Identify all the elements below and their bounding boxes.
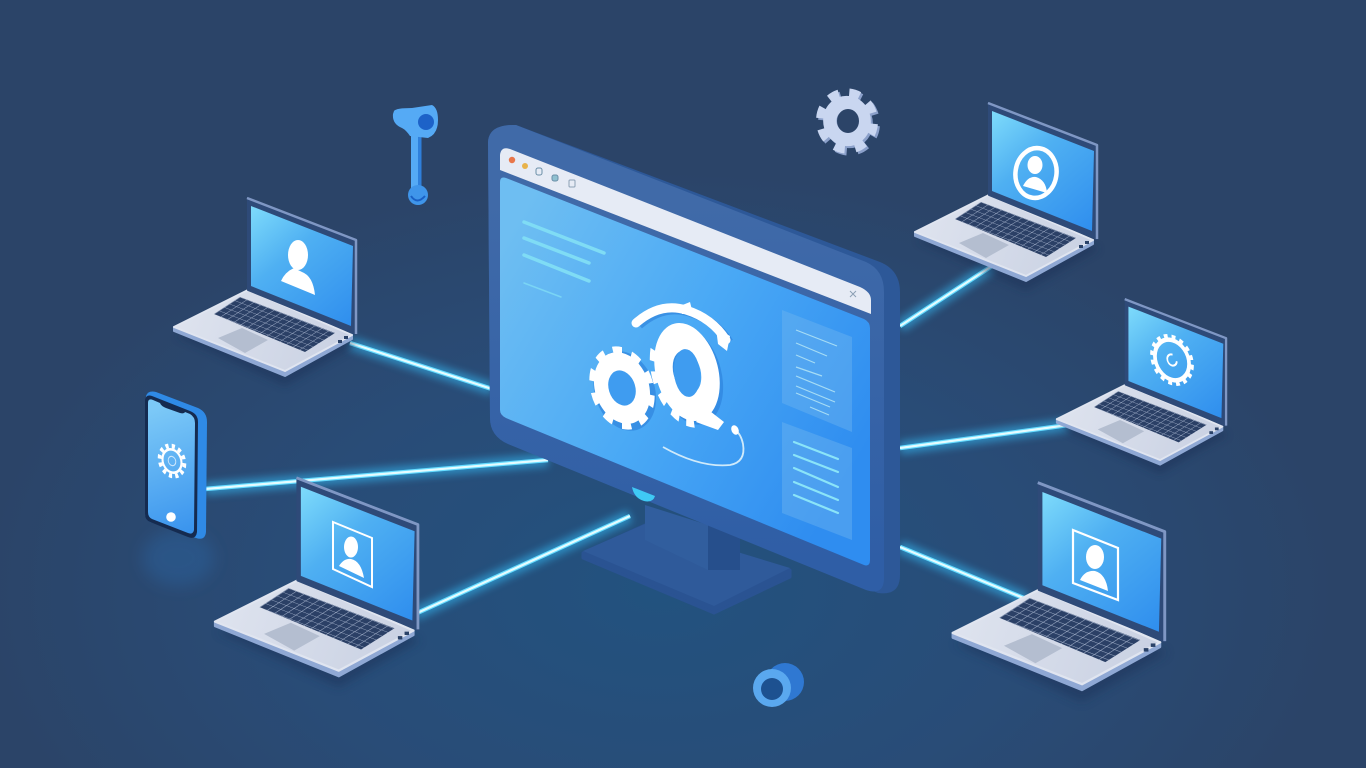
laptop: upper right — [915, 103, 1099, 291]
icon: ring — [753, 663, 804, 707]
icon: user in frame — [1073, 530, 1118, 600]
small gear icon on screen — [593, 346, 651, 430]
monitor body — [488, 125, 900, 593]
laptop: lower left — [215, 478, 420, 687]
icon: gear with spiral — [1152, 332, 1192, 388]
central monitor — [488, 125, 900, 593]
upper right panel — [782, 310, 852, 432]
icon: user in circle — [1012, 145, 1060, 201]
browser header — [500, 148, 871, 314]
connection line: upper-left laptop to monitor — [350, 343, 492, 389]
icon: user in frame — [333, 522, 372, 587]
laptop: lower right — [953, 483, 1167, 702]
large gear icon on screen — [636, 302, 730, 430]
icon: phone gear — [160, 443, 184, 479]
connection line: upper-right laptop to monitor — [900, 266, 992, 326]
connection line: lower-right laptop to monitor — [900, 547, 1026, 599]
connection line: middle-right laptop to monitor — [900, 425, 1068, 448]
cable curve with plug — [663, 424, 743, 465]
icon: wrench — [393, 105, 438, 205]
laptop: upper left — [174, 198, 358, 386]
connection line: phone to monitor — [205, 460, 548, 489]
phone — [142, 392, 214, 586]
icon: user — [281, 240, 315, 295]
lower right panel — [782, 422, 852, 540]
connection line: lower-left laptop to monitor — [415, 516, 630, 614]
LED indicator — [632, 487, 655, 501]
laptop: middle right — [1057, 299, 1228, 474]
monitor screen — [500, 178, 870, 565]
sidebar text lines — [524, 222, 604, 297]
icon: floating gear — [818, 90, 878, 154]
phone home button — [166, 512, 176, 522]
monitor stand — [583, 505, 790, 613]
window controls — [509, 157, 856, 297]
monitor front bezel — [488, 125, 884, 591]
